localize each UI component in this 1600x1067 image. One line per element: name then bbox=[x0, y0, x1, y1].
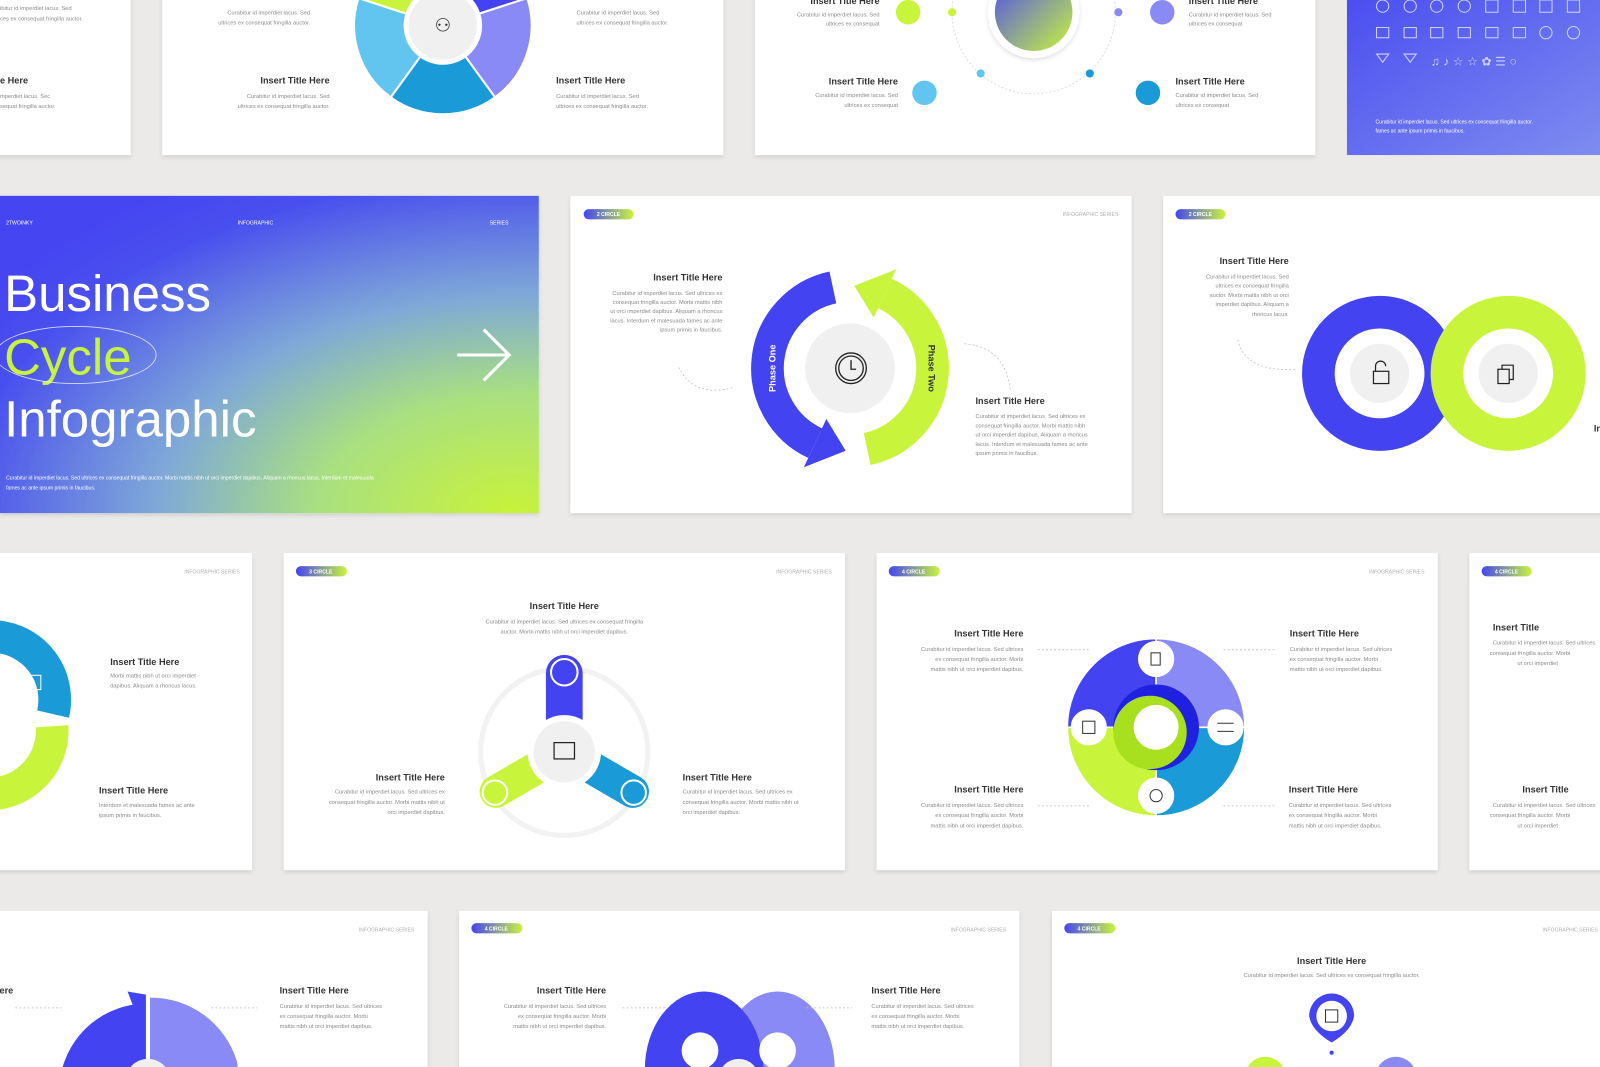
card: 3 circle: Curabitur id imperdiet lacus. Sed ultrices ex bbox=[335, 790, 445, 796]
text blocks: Curabitur id imperdiet lacus. Sed bbox=[1176, 93, 1258, 99]
card: 4 circle swirl: mattis nibh ut orci imperdiet dapibus. bbox=[1289, 823, 1382, 829]
text: right: ipsum primis in faucibus. bbox=[976, 451, 1038, 457]
text: left block: ultrices ex consequat fringilla auctor. bbox=[218, 20, 311, 26]
title: Business bbox=[4, 265, 211, 322]
card: linked rings: 2 CIRCLE bbox=[1189, 212, 1213, 218]
card: icon set gradient bbox=[1347, 0, 1600, 155]
card: 3 circle: auctor. Morbi mattis nibh ut orci imperdiet dapibus. bbox=[501, 629, 628, 635]
card: row4 middle overlapping: mattis nibh ut orci imperdiet dapibus. bbox=[513, 1024, 607, 1030]
card: 4 circle swirl: Insert Title Here bbox=[954, 785, 1023, 795]
card: row4 right pin: Curabitur id imperdiet lacus. Sed ultrices ex consequat fringilla auctor. bbox=[1243, 973, 1420, 979]
hero card: title: 2TWOINKY bbox=[6, 220, 33, 226]
card: row3 partial right: consequat fringilla auctor. Morbi bbox=[1490, 813, 1570, 819]
title: Cycle bbox=[4, 328, 132, 385]
card: 3 circle: Insert Title Here bbox=[530, 601, 599, 611]
icon grid: ♫ ♪ ☆ ☆ ✿ ☰ ○ bbox=[1431, 54, 1517, 68]
card: row3 partial right: Curabitur id imperdiet lacus. Sed ultrices bbox=[1493, 641, 1595, 647]
chart: two arrows: Phase One bbox=[768, 345, 778, 392]
icon: clock bbox=[836, 353, 866, 384]
card: row4 right pin: 4 CIRCLE bbox=[1078, 926, 1101, 932]
icon: pin bbox=[1309, 994, 1354, 1055]
card: 3 circle: Curabitur id imperdiet lacus. Sed ultrices ex bbox=[683, 790, 793, 796]
card: row4 left arrows: ex consequat fringilla auctor. Morbi bbox=[280, 1014, 368, 1020]
card: row3 partial left: Insert Title Here bbox=[99, 786, 168, 796]
card: 4 circle swirl: ex consequat fringilla auctor. Morbi bbox=[1289, 813, 1377, 819]
chart: two rings bbox=[1318, 312, 1569, 435]
text: right block: Curabitur id imperdiet lacus. Sed bbox=[556, 94, 639, 100]
text: left bbox=[610, 273, 723, 334]
text: right: consequat fringilla auctor. Morbi mattis nibh bbox=[976, 423, 1085, 429]
card: 3 circle: INFOGRAPHIC SERIES bbox=[776, 569, 832, 575]
photo circle bbox=[988, 0, 1080, 58]
card: linked rings bbox=[1163, 196, 1600, 513]
card: row4 left arrows: Curabitur id imperdiet lacus. Sed ultrices bbox=[280, 1004, 382, 1010]
text: left: ut orci imperdiet dapibus. Aliquam a rhoncus bbox=[610, 309, 723, 315]
text: left: Insert Title Here bbox=[1220, 256, 1289, 266]
chart: four quadrants bbox=[1067, 639, 1245, 816]
title: Infographic bbox=[4, 391, 256, 448]
text blocks: ultrices ex consequat bbox=[1176, 103, 1230, 109]
hero card: title: Curabitur id imperdiet lacus. Sed ultrices ex consequat fringilla auctor. Morbi mattis nibh ut orci imperdiet dapibus. Aliquam a rhoncus lacus. Interdum et malesuada bbox=[6, 475, 374, 481]
card: top-left partial bbox=[0, 0, 131, 155]
hero card: title: SERIES bbox=[490, 220, 509, 226]
card: row4 left arrows: INFOGRAPHIC SERIES bbox=[359, 927, 415, 933]
card: 4 circle swirl: ex consequat fringilla auctor. Morbi bbox=[935, 813, 1023, 819]
card: row4 right pin bbox=[1052, 911, 1600, 1067]
card: 3 circle: 3 CIRCLE bbox=[309, 569, 333, 575]
card: row4 right pin: INFOGRAPHIC SERIES bbox=[1542, 927, 1599, 933]
card: 3 circle: consequat fringilla auctor. Morbi mattis nibh ut bbox=[683, 800, 799, 806]
text: left: rhoncus lacus. bbox=[1252, 312, 1289, 318]
card: 4 circle swirl: mattis nibh ut orci imperdiet dapibus. bbox=[1290, 667, 1383, 673]
card: row3 partial left: Interdum et malesuada fames ac ante bbox=[99, 803, 195, 809]
text: right block: Insert Title Here bbox=[556, 76, 625, 86]
card: row3 partial right: Insert Title bbox=[1522, 785, 1569, 795]
card: 4 circle swirl: Curabitur id imperdiet lacus. Sed ultrices bbox=[921, 647, 1024, 653]
card: icon set gradient: fames ac ante ipsum primis in faucibus. bbox=[1376, 129, 1465, 135]
card: row4 middle overlapping: INFOGRAPHIC SERIES bbox=[951, 927, 1007, 933]
card: 4 circle swirl bbox=[877, 553, 1438, 870]
card: 2 circle arrows: 2 CIRCLE bbox=[597, 212, 621, 218]
card: top-left partial: e Here bbox=[0, 76, 28, 86]
card: row3 partial left: INFOGRAPHIC SERIES bbox=[184, 569, 240, 575]
card: row4 left arrows: Insert Title Here bbox=[280, 986, 349, 996]
icon: people: ⚇ bbox=[435, 15, 451, 36]
chart: partial ring bbox=[0, 637, 55, 794]
card: row3 partial left: ipsum primis in faucibus. bbox=[99, 813, 162, 819]
chart: two arrows bbox=[767, 269, 937, 467]
card: row4 left arrows: mattis nibh ut orci imperdiet dapibus. bbox=[280, 1024, 373, 1030]
text blocks bbox=[797, 0, 1272, 109]
card: row3 partial left bbox=[0, 553, 252, 870]
card: row3 partial right: consequat fringilla auctor. Morbi bbox=[1490, 651, 1570, 657]
text: right: ut orci imperdiet dapibus. Aliquam a rhoncus bbox=[976, 433, 1088, 439]
text blocks: ultrices ex consequat bbox=[1189, 22, 1243, 28]
text blocks: Curabitur id imperdiet lacus. Sed bbox=[797, 12, 880, 18]
text blocks: ultrices ex consequat bbox=[826, 22, 880, 28]
icon: arrow bbox=[457, 329, 509, 380]
card: 4 circle swirl: Curabitur id imperdiet lacus. Sed ultrices bbox=[1289, 803, 1391, 809]
card: 4 circle swirl: Insert Title Here bbox=[1289, 785, 1358, 795]
text: right block: ultrices ex consequat fringilla auctor. bbox=[577, 20, 669, 26]
text: left: auctor. Morbi mattis nibh ut orci bbox=[1210, 293, 1289, 299]
card: row3 partial right: Curabitur id imperdiet lacus. Sed ultrices bbox=[1493, 803, 1595, 809]
icon: documents bbox=[1498, 365, 1513, 384]
text: left: Insert Title Here bbox=[653, 273, 722, 283]
card: orbit with photo bbox=[755, 0, 1315, 155]
card: row4 middle overlapping: 4 CIRCLE bbox=[485, 926, 509, 932]
text: right block bbox=[556, 10, 669, 110]
card: top-left partial: sequat fringilla auctor. bbox=[0, 104, 56, 110]
card: 4 circle swirl: mattis nibh ut orci imperdiet dapibus. bbox=[931, 823, 1024, 829]
text blocks: Insert Title Here bbox=[1176, 77, 1245, 87]
icon: lock bbox=[1373, 361, 1389, 384]
card: row3 partial right bbox=[1469, 553, 1600, 870]
card: row4 middle overlapping: Curabitur id imperdiet lacus. Sed ultrices bbox=[871, 1004, 974, 1010]
card: row4 left arrows bbox=[0, 911, 428, 1067]
text: left bbox=[1206, 256, 1600, 433]
card: row4 middle overlapping: ex consequat fringilla auctor. Morbi bbox=[871, 1014, 960, 1020]
text: right: Insert Title Here bbox=[976, 396, 1045, 406]
card: 2 circle arrows: INFOGRAPHIC SERIES bbox=[1063, 212, 1119, 218]
card: row3 partial right: ut orci imperdiet bbox=[1517, 661, 1558, 667]
card: row3 partial right: 4 CIRCLE bbox=[1495, 569, 1519, 575]
card: row4 middle overlapping: Insert Title Here bbox=[871, 986, 941, 996]
card: 3 circle: consequat fringilla auctor. Morbi mattis nibh ut bbox=[329, 800, 445, 806]
icons bbox=[896, 0, 1174, 105]
card: row4 middle overlapping: Insert Title Here bbox=[537, 986, 606, 996]
card: 4 circle swirl: ex consequat fringilla auctor. Morbi bbox=[1290, 657, 1378, 663]
card: 4 circle swirl: Insert Title Here bbox=[954, 629, 1023, 639]
card: 4 circle swirl: Curabitur id imperdiet lacus. Sed ultrices bbox=[921, 803, 1024, 809]
text: left: Curabitur id imperdiet lacus. Sed ultrices ex bbox=[612, 291, 723, 297]
card: 3 circle: Insert Title Here bbox=[376, 772, 445, 782]
card: icon set gradient: Curabitur id imperdiet lacus. Sed ultrices ex consequat fringilla auctor. bbox=[1376, 119, 1533, 125]
text: left: lacus. Interdum et malesuada fames ac ante bbox=[610, 318, 722, 324]
icon grid bbox=[1377, 0, 1580, 68]
card: five segment cycle bbox=[162, 0, 723, 155]
text: left: ipsum primis in faucibus. bbox=[660, 328, 723, 334]
text: left: Curabitur id imperdiet lacus. Sed bbox=[1206, 274, 1289, 280]
card: top-left partial: ibitur id imperdiet lacus. Sed bbox=[0, 6, 72, 12]
text: left: consequat fringilla auctor. Morbi mattis nibh bbox=[613, 300, 722, 306]
text blocks: ultrices ex consequat bbox=[844, 103, 898, 109]
hero card: title: fames ac ante ipsum primis in faucibus. bbox=[6, 486, 95, 492]
card: 4 circle swirl: Insert Title Here bbox=[1290, 629, 1359, 639]
card: top-left partial: ces ex consequat fringilla auctor. bbox=[0, 16, 83, 22]
card: row4 middle overlapping: mattis nibh ut orci imperdiet dapibus. bbox=[871, 1024, 965, 1030]
chart: arrow pie bbox=[59, 992, 241, 1067]
card: row3 partial left: Insert Title Here bbox=[110, 657, 179, 667]
text: left block: Curabitur id imperdiet lacus. Sed bbox=[247, 94, 330, 100]
text: right block: Curabitur id imperdiet lacus. Sed bbox=[577, 10, 659, 16]
text: right bbox=[976, 396, 1088, 457]
card: 4 circle swirl: 4 CIRCLE bbox=[902, 569, 926, 575]
text: left block bbox=[218, 10, 330, 110]
card: 3 circle: orci imperdiet dapibus. bbox=[387, 810, 445, 816]
text blocks: Insert Title Here bbox=[829, 77, 898, 87]
card: row4 middle overlapping: Curabitur id imperdiet lacus. Sed ultrices bbox=[504, 1004, 606, 1010]
card: 2 circle arrows bbox=[570, 196, 1132, 513]
card: 4 circle swirl: mattis nibh ut orci imperdiet dapibus. bbox=[931, 667, 1024, 673]
card: top-left partial: mperdiet lacus. Sec bbox=[0, 94, 50, 100]
text: left: imperdiet dapibus. Aliquam a bbox=[1216, 302, 1290, 308]
card: 4 circle swirl: INFOGRAPHIC SERIES bbox=[1369, 569, 1425, 575]
card: 3 circle: Curabitur id imperdiet lacus. Sed ultrices ex consequat fringilla bbox=[485, 619, 644, 625]
chart: overlapping ovals bbox=[645, 992, 835, 1067]
card: 3 circle: orci imperdiet dapibus. bbox=[683, 810, 740, 816]
hero card: title: INFOGRAPHIC bbox=[238, 220, 273, 226]
text: left block: Curabitur id imperdiet lacus. Sed bbox=[227, 10, 310, 16]
chart: two arrows: Phase Two bbox=[927, 345, 937, 392]
chart: three arms bbox=[481, 659, 648, 835]
card: row4 right pin: Insert Title Here bbox=[1297, 956, 1366, 966]
card: row3 partial left: Morbi mattis nibh ut orci imperdiet bbox=[110, 673, 196, 679]
text: left: ultrices ex consequat fringilla bbox=[1216, 284, 1290, 290]
card: 4 circle swirl: Curabitur id imperdiet lacus. Sed ultrices bbox=[1290, 647, 1392, 653]
text: left block: Insert Title Here bbox=[260, 76, 330, 86]
text: right: Curabitur id imperdiet lacus. Sed ultrices ex bbox=[976, 414, 1086, 420]
card: 3 circle: Insert Title Here bbox=[683, 772, 752, 782]
card: row4 middle overlapping: ex consequat fringilla auctor. Morbi bbox=[518, 1014, 606, 1020]
card: row3 partial right: Insert Title bbox=[1493, 622, 1539, 632]
text blocks: Curabitur id imperdiet lacus. Sed bbox=[1189, 12, 1272, 18]
card: 4 circle swirl: ex consequat fringilla auctor. Morbi bbox=[935, 657, 1023, 663]
hero card: title bbox=[0, 196, 539, 513]
card: 3 circle bbox=[284, 553, 845, 870]
card: row3 partial right: ut orci imperdiet bbox=[1517, 823, 1558, 829]
card: row3 partial left: dapibus. Aliquam a rhoncus lacus. bbox=[110, 684, 197, 690]
text: right block: ultrices ex consequat fringilla auctor. bbox=[556, 104, 648, 110]
text: right: lacus. Interdum et malesuada fames ac ante bbox=[976, 442, 1088, 448]
chart: five segment donut bbox=[354, 0, 532, 114]
icons bbox=[1083, 653, 1234, 802]
title bbox=[4, 265, 256, 448]
text blocks: Curabitur id imperdiet lacus. Sed bbox=[815, 93, 898, 99]
card: row4 middle overlapping bbox=[459, 911, 1019, 1067]
text: left block: ultrices ex consequat fringilla auctor. bbox=[238, 104, 330, 110]
